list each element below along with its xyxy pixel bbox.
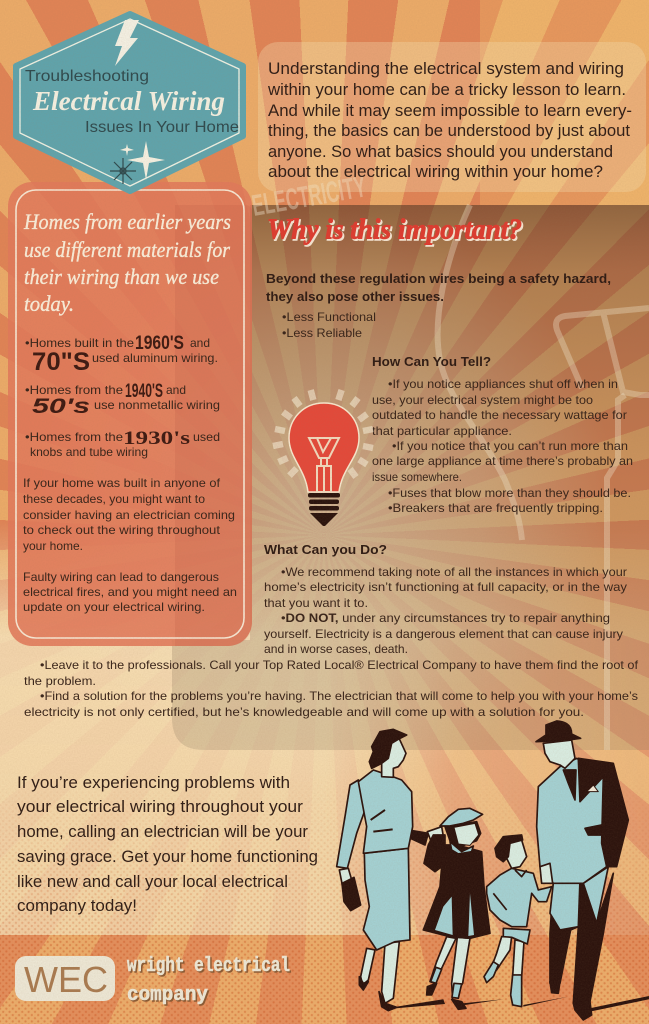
closing call to action: saving grace. Get your home functioning xyxy=(17,847,318,866)
1960s bullet: •Homes built in the xyxy=(25,336,134,350)
closing call to action: your electrical wiring throughout your xyxy=(17,797,303,816)
man pocket and hand xyxy=(585,825,602,835)
woman hand with purse xyxy=(339,868,353,890)
safety hazard text: •Less Functional xyxy=(282,310,376,324)
warm yellow wash top right xyxy=(480,0,649,205)
how can you tell: •If you notice appliances shut off when in xyxy=(388,377,618,391)
1930s bullet xyxy=(25,428,220,459)
bulb filament xyxy=(309,438,339,492)
panel heading: use different materials for xyxy=(24,237,230,262)
what can you do: and in worse cases, death. xyxy=(264,642,408,656)
logo wordmark: wright electrical xyxy=(127,955,290,978)
logo: wright electrical company xyxy=(15,955,292,1008)
what can you do xyxy=(24,542,639,719)
woman hair xyxy=(369,729,407,768)
what can you do: •Leave it to the professionals. Call your Top Rated Local® Electrical Company to have them find the root of xyxy=(40,658,639,672)
1960s bullet xyxy=(25,333,218,376)
how can you tell: How Can You Tell? xyxy=(372,354,491,369)
woman xyxy=(337,729,444,1011)
what can you do: yourself. Electricity is a dangerous element that can cause injury xyxy=(264,627,623,641)
1930s bullet: •Homes from the xyxy=(25,430,123,444)
man light trouser leg xyxy=(550,880,580,930)
girl face xyxy=(454,823,479,845)
boy hair xyxy=(495,835,523,862)
icon: lightning bolt xyxy=(115,20,139,66)
1960s bullet: and xyxy=(190,336,210,350)
badge title xyxy=(25,68,239,136)
boy shorts xyxy=(503,928,530,944)
man xyxy=(536,721,628,1020)
girl legs xyxy=(430,937,470,998)
intro text: Understanding the electrical system and wiring xyxy=(268,59,624,78)
icon: light bulb xyxy=(273,390,373,526)
decades paragraph: to check out the wiring throughout xyxy=(23,523,221,537)
heading: why is this important: Why is this important? xyxy=(268,215,524,247)
badge inner outline xyxy=(20,19,239,186)
dark content panel xyxy=(172,205,649,750)
boy jacket crease xyxy=(493,870,527,910)
what can you do: •Find a solution for the problems you’re having. The electrician that will come to help you with your home’s xyxy=(40,689,638,703)
1940s bullet: and xyxy=(166,383,186,397)
intro backing xyxy=(258,42,646,192)
girl xyxy=(423,808,490,1009)
boy jacket xyxy=(487,868,552,927)
intro text: thing, the basics can be understood by just about xyxy=(268,121,630,140)
halftone dots xyxy=(0,808,649,1024)
what can you do: home’s electricity isn’t functioning at full capacity, or in the way xyxy=(264,580,627,594)
badge hexagon xyxy=(16,14,243,191)
decades paragraph: If your home was built in anyone of xyxy=(23,476,221,490)
girl shoes xyxy=(427,983,466,1009)
what can you do: the problem. xyxy=(24,674,96,688)
woman head xyxy=(382,737,406,777)
what can you do: •DO NOT, under any circumstances try to repair anything xyxy=(281,611,610,625)
man hand xyxy=(540,863,553,883)
ghost bulb outline xyxy=(438,205,649,750)
logo wordmark: company xyxy=(128,986,210,1008)
panel heading: Homes from earlier years xyxy=(23,209,231,234)
how can you tell: outdated to handle the necessary wattage for xyxy=(372,408,627,422)
safety hazard text: •Less Reliable xyxy=(282,326,362,340)
1940s bullet xyxy=(25,381,220,418)
closing call to action: If you’re experiencing problems with xyxy=(17,773,290,792)
title badge xyxy=(16,14,243,191)
decades paragraph xyxy=(23,476,235,553)
intro text: within your home can be a tricky lesson to learn. xyxy=(267,80,626,99)
man face xyxy=(543,740,575,768)
girl hat xyxy=(440,808,483,826)
panel heading xyxy=(23,209,231,316)
what can you do: that you want it to. xyxy=(264,596,368,610)
closing call to action: home, calling an electrician will be your xyxy=(17,822,308,841)
panel heading: their wiring than we use xyxy=(24,264,219,289)
man trousers xyxy=(550,873,613,1003)
safety hazard text xyxy=(266,271,611,340)
logo wordmark: company xyxy=(127,984,208,1007)
1960s bullet: 1960'S xyxy=(135,333,184,354)
boy face xyxy=(507,840,527,868)
closing call to action: company today! xyxy=(17,896,137,915)
girl socks xyxy=(431,967,462,998)
logo wordmark: wright electrical xyxy=(128,956,292,980)
how can you tell: •If you notice that you can’t run more than xyxy=(392,439,628,453)
1940s bullet: 50's xyxy=(32,395,90,418)
bulb rays xyxy=(273,390,373,477)
man jacket front xyxy=(537,758,607,883)
icon: sparkles xyxy=(110,141,165,184)
woman legs xyxy=(361,942,399,1003)
logo badge: WEC xyxy=(24,959,108,1000)
how can you tell: •Fuses that blow more than they should be. xyxy=(388,486,631,500)
girl hair xyxy=(445,822,481,847)
girl coat panels xyxy=(435,893,474,936)
intro panel xyxy=(258,42,646,192)
panel backing xyxy=(8,182,252,646)
badge title: Issues In Your Home xyxy=(85,119,239,136)
panel inner outline xyxy=(16,190,244,638)
lower cream veil xyxy=(0,520,649,935)
1960s bullet: 70"S xyxy=(32,348,90,376)
woman arm xyxy=(337,780,365,868)
intro text xyxy=(267,59,632,181)
panel: homes from earlier years xyxy=(8,182,252,646)
woman hand xyxy=(427,827,444,843)
ground shadows xyxy=(397,996,649,1012)
decades paragraph: these decades, you might want to xyxy=(23,492,205,506)
woman shoes xyxy=(359,977,397,1011)
closing call to action xyxy=(17,773,318,915)
decades paragraph: your home. xyxy=(23,539,83,553)
intro text: And while it may seem impossible to learn every- xyxy=(268,101,632,120)
safety hazard text: Beyond these regulation wires being a safety hazard, xyxy=(266,271,611,286)
badge title: Troubleshooting xyxy=(25,68,149,85)
woman jacket pocket xyxy=(371,810,393,832)
illustration: retro family xyxy=(337,721,649,1020)
how can you tell: that particular appliance. xyxy=(372,424,512,438)
how can you tell: issue somewhere. xyxy=(372,470,462,484)
badge title: Electrical Wiring xyxy=(32,86,225,116)
faulty wiring paragraph: electrical fires, and you might need an xyxy=(23,585,237,599)
logo wordmark xyxy=(127,955,292,1008)
1940s bullet: •Homes from the xyxy=(25,383,123,397)
woman far sleeve xyxy=(408,830,428,845)
man dark side xyxy=(578,758,628,867)
1940s bullet: use nonmetallic wiring xyxy=(94,398,220,412)
man lapel and tie xyxy=(563,770,576,800)
man shoes xyxy=(550,977,592,1020)
safety hazard text: they also pose other issues. xyxy=(266,289,444,304)
faulty wiring paragraph xyxy=(23,570,237,614)
how can you tell xyxy=(372,354,633,515)
heading: why is this important: Why is this important? xyxy=(267,214,522,246)
intro text: about the electrical wiring within your home? xyxy=(268,162,603,181)
what can you do: electricity is not only certified, but he’s knowledgeable and will come up with a solution for you. xyxy=(24,705,584,719)
1960s bullet: used aluminum wiring. xyxy=(92,351,218,365)
decades paragraph: consider having an electrician coming xyxy=(23,508,235,522)
closing call to action: like new and call your local electrical xyxy=(17,872,288,891)
1930s bullet: knobs and tube wiring xyxy=(30,445,148,459)
girl coat xyxy=(423,835,490,938)
panel heading: today. xyxy=(24,291,74,316)
bulb glass xyxy=(289,403,359,492)
ghost lettering: ELECTRICITY xyxy=(249,170,368,223)
how can you tell: use, your electrical system might be too xyxy=(372,393,593,407)
panel shadow block xyxy=(175,205,252,646)
what can you do: •We recommend taking note of all the instances in which your xyxy=(281,565,627,579)
1930s bullet: 1930's xyxy=(123,428,190,449)
how can you tell: one large appliance at time there’s probably an xyxy=(372,454,633,468)
girl collar xyxy=(450,842,473,854)
faulty wiring paragraph: Faulty wiring can lead to dangerous xyxy=(23,570,219,584)
bulb glow wash xyxy=(0,200,649,800)
1930s bullet: used xyxy=(193,430,220,444)
faulty wiring paragraph: update on your electrical wiring. xyxy=(23,600,205,614)
woman jacket xyxy=(358,770,413,853)
boy xyxy=(484,835,552,1007)
man pocket square xyxy=(587,785,598,792)
footer band lightening xyxy=(0,935,649,1024)
boy legs xyxy=(492,937,524,977)
intro text: anyone. So what basics should you understand xyxy=(268,142,613,161)
1940s bullet: 1940'S xyxy=(125,381,163,402)
woman skirt xyxy=(363,848,410,950)
what can you do: What Can you Do? xyxy=(264,542,387,557)
bulb screw base xyxy=(308,493,340,526)
boy socks and shoes xyxy=(484,962,498,983)
how can you tell: •Breakers that are frequently tripping. xyxy=(388,501,603,515)
man hat xyxy=(536,721,581,742)
